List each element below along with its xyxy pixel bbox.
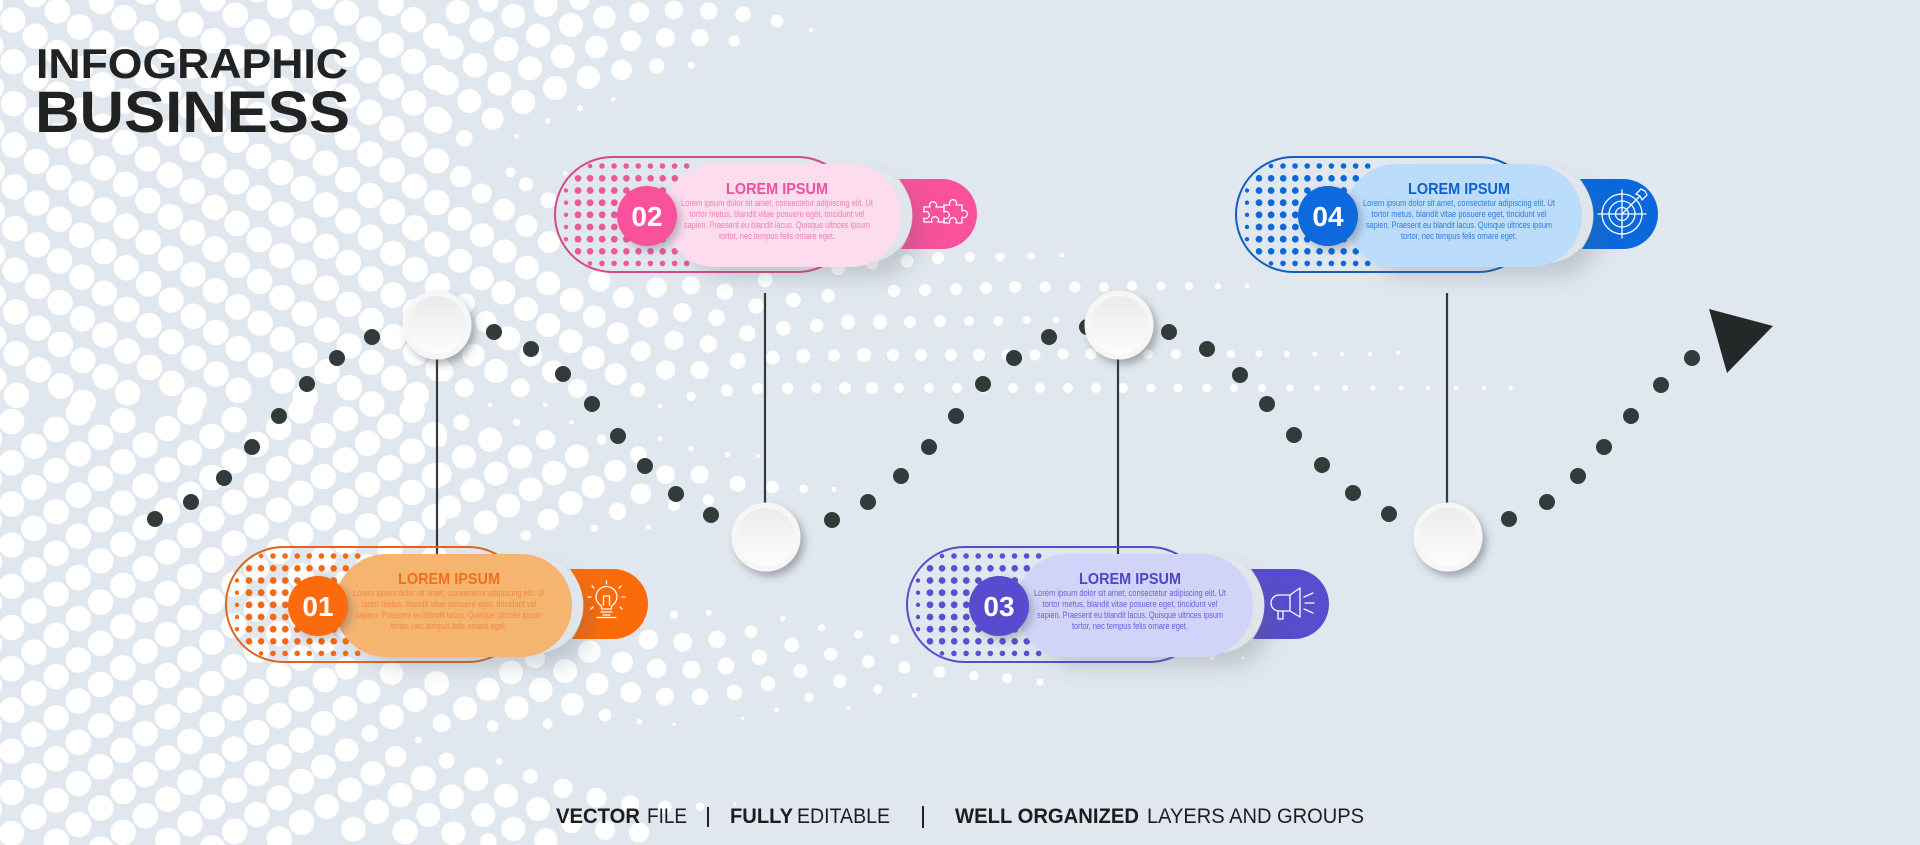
- backing 02: [674, 168, 912, 263]
- icon: megaphone: [1271, 588, 1314, 619]
- card 03: [1016, 554, 1253, 657]
- dot pattern 04: [1247, 166, 1368, 263]
- node circle 2: [732, 502, 800, 572]
- body text 04: tortor metus, blandit vitae posuere eget, tincidunt vel: [1372, 209, 1546, 220]
- heading 01: LOREM IPSUM: [398, 571, 500, 588]
- tab 04: [1580, 179, 1658, 249]
- body text 04: tortor, nec tempus felis ornare eget.: [1401, 231, 1517, 242]
- number badge 02: 02: [631, 201, 663, 232]
- number badge 01: 01: [302, 591, 334, 622]
- body text 01: [353, 588, 545, 632]
- icon: light bulb: [588, 581, 625, 618]
- body text 03: Lorem ipsum dolor sit amet, consectetur adipiscing elit. Ut: [1034, 588, 1226, 599]
- heading 04: LOREM IPSUM: [1408, 181, 1510, 198]
- dot pattern 02: [566, 166, 688, 263]
- tab 03: [1251, 569, 1329, 639]
- panel: step 04: [1236, 157, 1658, 272]
- tab 02: [899, 179, 977, 249]
- body text 03: tortor metus, blandit vitae posuere eget, tincidunt vel: [1042, 599, 1218, 610]
- top fringe dots: [428, 0, 813, 187]
- node circle 1: [402, 290, 472, 360]
- node circle 4: [1414, 502, 1482, 572]
- footer tagline: LAYERS AND GROUPS: [1147, 805, 1364, 828]
- body text 02: sapien. Praesent eu blandit lacus. Quisque ultrices ipsum: [684, 220, 870, 231]
- footer tagline: FULLY: [730, 805, 793, 828]
- backing 01: [345, 558, 583, 653]
- card 02: [664, 164, 901, 267]
- body text 03: tortor, nec tempus felis ornare eget.: [1072, 621, 1188, 632]
- tab 01: [570, 569, 648, 639]
- body text 01: sapien. Praesent eu blandit lacus. Quisque ultrices ipsum: [356, 610, 542, 621]
- footer tagline: EDITABLE: [797, 805, 890, 828]
- title: BUSINESS: [35, 80, 350, 145]
- card 04: [1345, 164, 1582, 267]
- outline capsule 04: [1236, 157, 1536, 272]
- footer tagline: FILE: [647, 805, 687, 828]
- dots left of panel 02: [448, 177, 560, 280]
- backing 03: [1026, 558, 1264, 653]
- dot pattern 01: [237, 556, 358, 653]
- footer tagline: VECTOR: [556, 805, 640, 828]
- heading 03: LOREM IPSUM: [1079, 571, 1181, 588]
- outline capsule 01: [226, 547, 526, 662]
- number badge 04: 04: [1312, 201, 1344, 232]
- number badge 01: [288, 576, 348, 636]
- panel: step 03: [907, 547, 1329, 662]
- centre dots: [428, 266, 840, 545]
- body text 02: Lorem ipsum dolor sit amet, consectetur adipiscing elit. Ut: [681, 198, 873, 209]
- heading 02: LOREM IPSUM: [726, 181, 828, 198]
- body text 02: [681, 198, 873, 242]
- right horizontal fading dots: [831, 252, 1513, 686]
- body text 02: tortor, nec tempus felis ornare eget.: [719, 231, 835, 242]
- dots below panel 01: [311, 657, 488, 845]
- body text 04: Lorem ipsum dolor sit amet, consectetur adipiscing elit. Ut: [1363, 198, 1555, 209]
- lower halftone rows: [0, 409, 435, 845]
- connector lines: [437, 293, 1447, 556]
- title: INFOGRAPHIC: [36, 40, 348, 87]
- panel: step 01: [226, 547, 648, 662]
- upper halftone rows: [0, 0, 439, 404]
- bottom fringe dots: [471, 610, 979, 845]
- body text 01: tortor metus, blandit vitae posuere eget, tincidunt vel: [362, 599, 536, 610]
- icon: puzzle: [924, 200, 967, 223]
- node circle 3: [1084, 290, 1154, 360]
- outline capsule 02: [555, 157, 855, 272]
- footer tagline: WELL ORGANIZED: [955, 805, 1139, 828]
- body text 02: tortor metus, blandit vitae posuere eget, tincidunt vel: [690, 209, 864, 220]
- body text 03: [1034, 588, 1226, 632]
- number badge 04: [1298, 186, 1358, 246]
- title: [35, 40, 350, 145]
- footer tagline: [556, 805, 1364, 828]
- backing 04: [1355, 168, 1593, 263]
- body text 03: sapien. Praesent eu blandit lacus. Quisque ultrices ipsum: [1037, 610, 1223, 621]
- arrow head: [1709, 309, 1773, 373]
- body text 04: [1363, 198, 1555, 242]
- dot pattern 03: [918, 556, 1040, 653]
- body text 01: tortor, nec tempus felis ornare eget.: [391, 621, 507, 632]
- card 01: [335, 554, 572, 657]
- panel: step 02: [555, 157, 977, 272]
- number badge 02: [617, 186, 677, 246]
- body text 01: Lorem ipsum dolor sit amet, consectetur adipiscing elit. Ut: [353, 588, 545, 599]
- halftone dot field: [0, 0, 1513, 845]
- number badge 03: [969, 576, 1029, 636]
- body text 04: sapien. Praesent eu blandit lacus. Quisque ultrices ipsum: [1366, 220, 1552, 231]
- outline capsule 03: [907, 547, 1207, 662]
- number badge 03: 03: [983, 591, 1015, 622]
- dotted wave path: [147, 319, 1700, 528]
- icon: target: [1598, 189, 1647, 238]
